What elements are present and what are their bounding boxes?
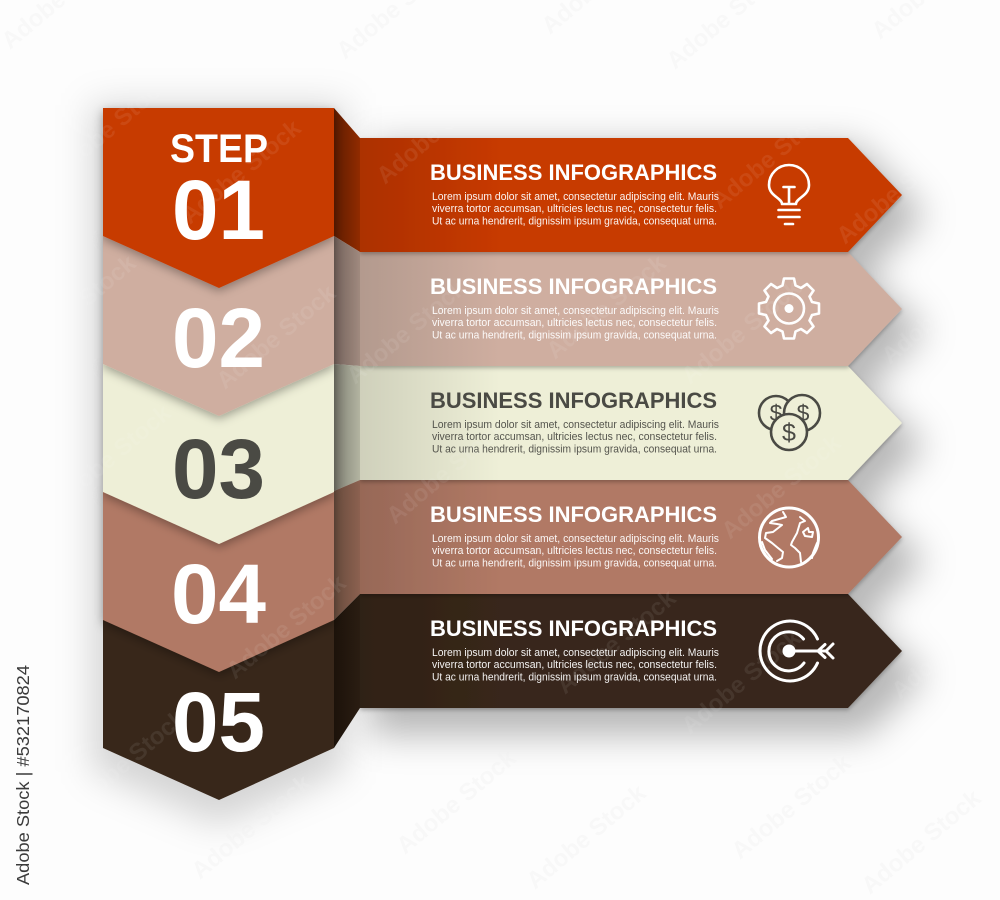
text block 5: Ut ac urna hendrerit, dignissim ipsum gravida, consequat urna.: [432, 672, 717, 684]
text block 3: Ut ac urna hendrerit, dignissim ipsum gravida, consequat urna.: [432, 444, 717, 456]
text block 1: BUSINESS INFOGRAPHICS: [430, 160, 717, 185]
icon: coins: [759, 395, 820, 450]
watermark pattern: Adobe Stock: [677, 624, 807, 740]
watermark pattern: Adobe Stock: [522, 779, 652, 895]
watermark pattern: Adobe Stock: [717, 429, 847, 545]
number 05: 05: [172, 675, 265, 769]
text block 2: viverra tortor accumsan, ultricies lectus nec, consectetur felis.: [432, 317, 717, 329]
text block 2: BUSINESS INFOGRAPHICS: [430, 274, 717, 299]
watermark pattern: Adobe Stock: [707, 99, 837, 215]
step label: STEP: [170, 127, 268, 171]
text block 2: [430, 274, 719, 342]
watermark pattern: Adobe Stock: [857, 784, 987, 900]
watermark pattern: Adobe Stock: [372, 74, 502, 190]
watermark pattern: Adobe Stock: [552, 584, 682, 700]
text block 3: viverra tortor accumsan, ultricies lectus nec, consectetur felis.: [432, 431, 717, 443]
text block 5: [430, 616, 719, 684]
arrow bar 5: [360, 594, 902, 708]
watermark pattern: Adobe Stock: [187, 769, 317, 885]
stock id vertical text: Adobe Stock | #532170824: [13, 665, 33, 885]
watermark pattern: Adobe Stock: [177, 114, 307, 230]
number 01: 01: [172, 163, 265, 257]
step 4 chevron: [103, 492, 334, 672]
watermark pattern: Adobe Stock: [47, 399, 177, 515]
text block 5: viverra tortor accumsan, ultricies lectus nec, consectetur felis.: [432, 659, 717, 671]
icon: coins: $: [770, 400, 783, 426]
number 02: 02: [172, 291, 265, 385]
step 5 chevron: [103, 620, 334, 800]
watermark pattern: Adobe Stock: [727, 749, 857, 865]
icon: coins: $: [797, 400, 810, 426]
watermark pattern: Adobe Stock: [222, 569, 352, 685]
watermark pattern: Adobe Stock: [47, 69, 177, 185]
text block 5: BUSINESS INFOGRAPHICS: [430, 616, 717, 641]
text block 4: viverra tortor accumsan, ultricies lectus nec, consectetur felis.: [432, 545, 717, 557]
arrow bar 2: [360, 252, 902, 366]
text block 1: viverra tortor accumsan, ultricies lectus nec, consectetur felis.: [432, 203, 717, 215]
icon: target with arrow: [760, 621, 833, 681]
text block 1: [430, 160, 719, 228]
text block 4: Lorem ipsum dolor sit amet, consectetur adipiscing elit. Mauris: [432, 533, 719, 545]
step 3 chevron: [103, 364, 334, 544]
step 2 chevron: [103, 236, 334, 416]
text block 4: BUSINESS INFOGRAPHICS: [430, 502, 717, 527]
soft background shadows: [92, 105, 925, 825]
watermark pattern: Adobe Stock: [212, 279, 342, 395]
number 03: 03: [172, 422, 265, 516]
column side faces: [334, 108, 360, 748]
watermark pattern: Adobe Stock: [542, 249, 672, 365]
watermark pattern: Adobe Stock: [62, 704, 192, 820]
text block 3: BUSINESS INFOGRAPHICS: [430, 388, 717, 413]
text block 1: Ut ac urna hendrerit, dignissim ipsum gravida, consequat urna.: [432, 216, 717, 228]
text block 3: [430, 388, 719, 456]
number 04: 04: [171, 547, 266, 641]
watermark pattern: Adobe Stock: [677, 274, 807, 390]
arrow bar 3: [360, 366, 902, 480]
text block 5: Lorem ipsum dolor sit amet, consectetur adipiscing elit. Mauris: [432, 647, 719, 659]
icon: coins: $: [782, 419, 796, 447]
text block 1: Lorem ipsum dolor sit amet, consectetur adipiscing elit. Mauris: [432, 191, 719, 203]
arrow bar 1: [360, 138, 902, 252]
text block 4: [430, 502, 719, 570]
watermark pattern: Adobe Stock: [12, 249, 142, 365]
text block 2: Lorem ipsum dolor sit amet, consectetur adipiscing elit. Mauris: [432, 305, 719, 317]
watermark pattern: Adobe Stock: [392, 744, 522, 860]
step 1 chevron: [103, 108, 334, 288]
watermark pattern: Adobe Stock: [832, 134, 962, 250]
icon: light bulb: [769, 165, 809, 224]
icon: globe: [760, 508, 818, 567]
watermark pattern: Adobe Stock: [382, 414, 512, 530]
text block 4: Ut ac urna hendrerit, dignissim ipsum gravida, consequat urna.: [432, 558, 717, 570]
watermark pattern: Adobe Stock: [342, 274, 472, 390]
arrow bar 4: [360, 480, 902, 594]
icon: gear: [759, 278, 819, 338]
text block 2: Ut ac urna hendrerit, dignissim ipsum gravida, consequat urna.: [432, 330, 717, 342]
text block 3: Lorem ipsum dolor sit amet, consectetur adipiscing elit. Mauris: [432, 419, 719, 431]
